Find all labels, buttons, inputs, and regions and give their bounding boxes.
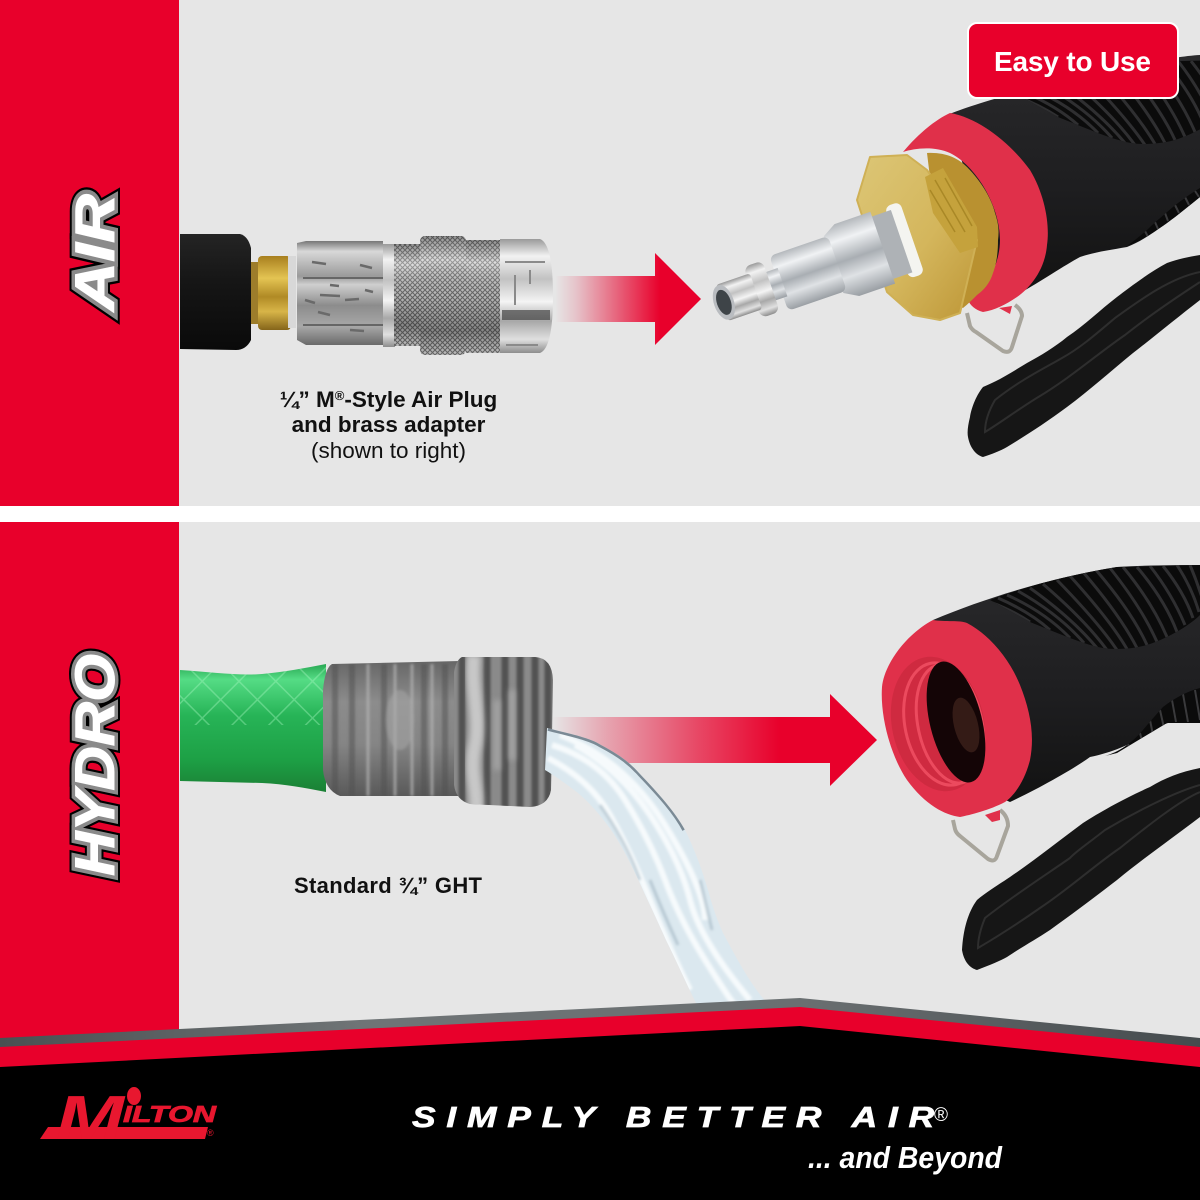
dark opening (916, 656, 996, 788)
knurled collar (420, 236, 500, 355)
red tab (985, 810, 1000, 822)
brass collar (927, 153, 999, 308)
coupler end (500, 239, 553, 353)
grip ribs (990, 565, 1200, 650)
blow gun: air end (702, 55, 1200, 457)
grip body (933, 565, 1200, 802)
heading: AIR: AIR (63, 193, 126, 313)
caption: air plug: and brass adapter (292, 412, 486, 437)
caption: air plug: ® (335, 388, 345, 403)
badge: easy to use: Easy to Use (994, 46, 1151, 77)
metal ferrule (320, 660, 462, 800)
heading: HYDRO: HYDRO (63, 654, 126, 876)
logo registered mark: ® (207, 1128, 214, 1138)
air side band (0, 0, 179, 506)
badge: easy to use (968, 23, 1178, 98)
water stream (545, 728, 764, 1003)
lever (968, 255, 1200, 457)
logo: Milton (40, 1084, 217, 1153)
panel: hydro background (0, 522, 1200, 1052)
caption: air plug (280, 387, 497, 463)
plug flange (743, 261, 780, 318)
mesh screen (948, 695, 984, 755)
panel: air background (0, 0, 1200, 506)
nose bore (713, 288, 735, 317)
logo bar (40, 1127, 208, 1139)
nose opening (709, 282, 739, 323)
plug hex (821, 212, 895, 301)
thread seal (885, 202, 924, 279)
arrow: air (555, 253, 701, 345)
plug nose (716, 273, 762, 321)
logo dot (127, 1087, 141, 1105)
red end ring (882, 620, 1032, 817)
brass hex adapter (857, 155, 978, 320)
red end ring (903, 113, 1048, 312)
steel hex body (297, 241, 384, 345)
tagline: ... and Beyond (808, 1140, 1003, 1175)
slogan registered mark: ® (934, 1105, 948, 1126)
air plug (702, 202, 924, 342)
red tab (999, 306, 1012, 314)
caption: air plug: (shown to right) (311, 438, 466, 463)
wire ring (953, 810, 1008, 860)
air hose with coupler (180, 234, 553, 355)
caption: air plug: ¼” M (280, 387, 335, 412)
lower grip ribs (1127, 188, 1200, 246)
heading: HYDRO: HYDRO (63, 654, 126, 876)
arrow: hydro (552, 694, 877, 786)
heading: AIR: AIR (63, 193, 126, 313)
threads (870, 210, 912, 280)
threads (893, 655, 994, 793)
hydro side band (0, 522, 179, 1052)
caption: air plug: -Style Air Plug (344, 387, 497, 412)
red stripe (0, 1007, 1200, 1075)
garden hose with fitting (180, 657, 553, 807)
lever (962, 768, 1200, 970)
lower grip ribs (1105, 688, 1200, 756)
heading: AIR: AIR (63, 193, 126, 313)
green hose (180, 664, 326, 792)
logo name: ILTON (123, 1101, 217, 1127)
footer band (0, 998, 1200, 1200)
slogan: SIMPLY BETTER AIR (412, 1101, 935, 1133)
plug body (769, 236, 847, 311)
heading: HYDRO: HYDRO (63, 654, 126, 876)
brass nut (251, 256, 296, 330)
ring face (879, 648, 997, 800)
plug neck (763, 268, 787, 302)
caption: GHT: Standard ¾” GHT (294, 873, 483, 898)
gray stripe (0, 998, 1200, 1060)
black air hose (180, 234, 251, 350)
blow gun: hydro end (879, 565, 1200, 970)
knurled neck (383, 244, 422, 347)
grip body (947, 55, 1200, 293)
threaded end (454, 657, 553, 807)
black base (0, 1026, 1200, 1200)
wire ring (967, 305, 1022, 352)
logo M: M (56, 1084, 126, 1153)
grip ribs (1018, 60, 1200, 145)
